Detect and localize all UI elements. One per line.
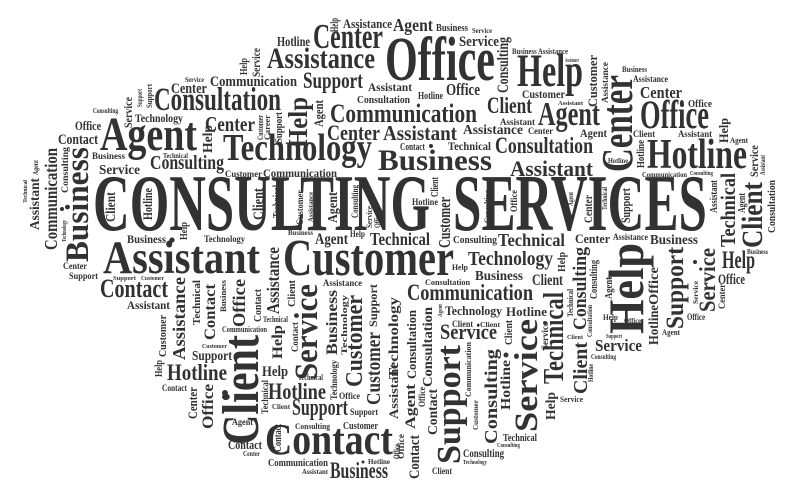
supporting words: Assistance — [323, 278, 362, 288]
supporting words: Consultation — [421, 307, 436, 387]
supporting words: Help — [603, 313, 618, 322]
supporting words: Service — [472, 27, 492, 35]
supporting words: Office — [392, 444, 402, 459]
supporting words: Technical — [298, 373, 324, 382]
supporting words: Service — [747, 144, 761, 177]
supporting words: Center — [243, 450, 260, 458]
supporting words: Customer — [202, 344, 227, 350]
supporting words: Assistant — [28, 178, 43, 230]
supporting words: Assistance — [307, 192, 315, 222]
supporting words: Agent — [403, 384, 419, 429]
supporting words: Technical — [272, 185, 283, 218]
supporting words: Support — [145, 84, 154, 108]
supporting words: Consultation — [154, 82, 281, 118]
supporting words: Office — [688, 98, 712, 110]
supporting words: Assistant — [558, 101, 583, 107]
supporting words: Technical — [539, 292, 570, 384]
supporting words: Service — [540, 322, 550, 350]
supporting words: Customer — [435, 197, 454, 248]
word: Technology: Technology — [223, 127, 372, 169]
word: Help (vertical): Help — [598, 243, 654, 334]
supporting words: Consulting — [481, 349, 501, 444]
supporting words: Business — [324, 290, 341, 355]
supporting words: Hotline — [636, 140, 647, 168]
supporting words: Business — [475, 269, 524, 284]
supporting words: Technology — [340, 295, 349, 355]
supporting words: Assistance — [600, 62, 610, 103]
supporting words: Assistance — [169, 277, 189, 360]
supporting words: Assistance — [263, 247, 283, 314]
supporting words: Technology — [329, 360, 339, 400]
supporting words: Customer — [343, 421, 378, 432]
supporting words: Hotline — [167, 360, 227, 385]
supporting words: Support — [662, 246, 689, 329]
supporting words: Consultation — [586, 305, 594, 337]
supporting words: Consultation — [404, 309, 419, 379]
supporting words: Support — [606, 334, 622, 340]
supporting words: Technology — [62, 220, 68, 242]
supporting words: Office — [200, 384, 217, 429]
supporting words: Consulting — [570, 247, 591, 330]
supporting words: Help — [350, 229, 365, 239]
supporting words: Client — [430, 176, 441, 197]
supporting words: Business — [330, 458, 388, 483]
supporting words: Client — [736, 182, 769, 248]
supporting words: Communication — [407, 280, 533, 305]
supporting words: Consulting — [350, 185, 360, 218]
supporting words: Client — [272, 403, 291, 411]
supporting words: Hotline — [499, 360, 514, 410]
supporting words: Technology — [135, 111, 183, 125]
supporting words: Customer — [225, 169, 262, 179]
supporting words: Hotline — [506, 304, 547, 319]
supporting words: Consulting — [93, 107, 118, 115]
supporting words: Business — [92, 151, 125, 161]
supporting words: Customer — [256, 115, 265, 140]
supporting words: Center — [313, 17, 383, 56]
title: Consulting: CONSULTING — [93, 160, 430, 248]
supporting words: Assistant — [709, 179, 720, 213]
supporting words: Center — [185, 387, 200, 419]
supporting words: Career — [263, 115, 272, 140]
supporting words: Client — [452, 319, 473, 329]
word: Agent: Agent — [100, 108, 197, 161]
supporting words: Customer — [141, 276, 164, 282]
supporting words: Client — [567, 335, 583, 341]
supporting words: Technical — [191, 280, 203, 325]
supporting words: Assistant — [383, 121, 457, 145]
supporting words: Hotline — [587, 364, 595, 382]
supporting words: Consulting — [150, 152, 224, 174]
supporting words: Agent — [567, 191, 575, 206]
supporting words: Consulting — [589, 260, 600, 299]
supporting words: Client — [532, 272, 563, 289]
supporting words: Client — [633, 129, 655, 139]
supporting words: Support — [69, 271, 98, 281]
word: Client (vertical): Client — [213, 334, 270, 445]
supporting words: Help — [238, 58, 250, 75]
supporting words: Consulting — [690, 171, 713, 177]
supporting words: Business — [60, 147, 96, 262]
supporting words: Office — [687, 312, 705, 322]
supporting words: Assistance — [613, 232, 648, 242]
supporting words: Communication — [210, 74, 298, 90]
supporting words: Contact — [290, 322, 300, 352]
supporting words: Technical — [498, 230, 565, 250]
word: Assistant: Assistant — [103, 232, 260, 284]
supporting words: Assistant — [510, 156, 594, 181]
supporting words: Business — [288, 229, 313, 237]
supporting words: Help — [283, 97, 313, 148]
supporting words: Office — [647, 267, 662, 305]
supporting words: Hotline — [412, 197, 438, 207]
supporting words: Center — [327, 120, 380, 145]
supporting words: Office — [446, 80, 480, 99]
supporting words: Client — [487, 93, 532, 118]
supporting words: Agent — [232, 417, 253, 427]
supporting words: Client — [480, 321, 501, 329]
supporting words: Service — [249, 47, 263, 77]
supporting words: Technical — [503, 433, 537, 444]
supporting words: Assistant — [500, 117, 535, 127]
word: Contact: Contact — [265, 415, 393, 464]
supporting words: Communication — [330, 99, 477, 128]
supporting words: Office — [373, 212, 382, 228]
supporting words: Technical — [370, 229, 430, 249]
supporting words: Consulting — [60, 146, 70, 193]
supporting words: Customer — [342, 295, 368, 387]
supporting words: Technology — [468, 248, 553, 270]
supporting words: Service — [121, 96, 135, 128]
supporting words: Communication — [642, 171, 687, 179]
supporting words: Communication — [268, 458, 328, 469]
supporting words: Support — [618, 187, 633, 223]
supporting words: Assistant — [759, 155, 767, 175]
supporting words: Consulting — [453, 235, 497, 246]
supporting words: Support — [431, 344, 468, 464]
word: Customer: Customer — [283, 230, 454, 287]
supporting words: Help — [517, 45, 583, 97]
supporting words: Service — [289, 284, 325, 380]
supporting words: Office — [339, 391, 360, 401]
supporting words: Center — [640, 83, 682, 102]
supporting words: Support — [192, 349, 232, 364]
supporting words: Help — [154, 360, 165, 377]
supporting words: Client — [570, 342, 592, 394]
supporting words: Office — [509, 190, 519, 212]
supporting words: Technical — [23, 180, 29, 203]
supporting words: Technical — [448, 139, 492, 153]
supporting words: Technical — [566, 288, 575, 317]
supporting words: Contact — [273, 423, 284, 452]
supporting words: Technology — [387, 297, 402, 379]
supporting words: Agent — [311, 99, 326, 127]
supporting words: Consulting — [483, 190, 492, 223]
supporting words: Support — [350, 407, 378, 417]
supporting words: Business — [219, 280, 228, 312]
supporting words: Customer — [363, 332, 385, 405]
supporting words: Help — [201, 125, 216, 153]
supporting words: Communication — [41, 148, 61, 250]
supporting words: Client — [251, 188, 267, 220]
supporting words: Consulting — [295, 422, 330, 431]
supporting words: Assistant — [127, 298, 170, 312]
supporting words: Customer — [585, 55, 600, 107]
supporting words: Agent — [662, 328, 680, 337]
supporting words: Assistant — [678, 129, 712, 139]
supporting words: Agent — [730, 136, 748, 145]
supporting words: Communication — [464, 341, 473, 397]
supporting words: Support — [113, 276, 136, 282]
supporting words: Customer — [295, 190, 305, 225]
supporting words: Office — [718, 272, 745, 288]
supporting words: Center — [575, 231, 610, 246]
supporting words: Agent — [438, 304, 444, 317]
supporting words: Help — [178, 222, 190, 240]
supporting words: Contact — [100, 274, 168, 303]
supporting words: Technical — [260, 380, 270, 414]
supporting words: Service — [595, 336, 642, 355]
supporting words: Help — [452, 263, 469, 272]
supporting words: Assistant — [302, 468, 329, 476]
supporting words: Support — [136, 89, 144, 107]
supporting words: Technical — [163, 152, 188, 160]
supporting words: Agent — [538, 96, 600, 133]
supporting words: Consulting — [463, 446, 504, 460]
supporting words: Service — [185, 76, 204, 84]
supporting words: Office — [624, 317, 641, 325]
supporting words: Assistant — [386, 363, 401, 419]
supporting words: Center — [528, 126, 553, 136]
supporting words: Communication — [222, 325, 267, 334]
supporting words: Agent — [737, 192, 748, 213]
supporting words: Customer — [522, 87, 566, 101]
supporting words: Hotline — [277, 35, 310, 50]
supporting words: Center — [581, 194, 595, 223]
supporting words: Help — [270, 325, 286, 359]
supporting words: Hotline — [647, 305, 662, 345]
supporting words: Technology — [445, 303, 502, 318]
supporting words: Technical — [601, 187, 609, 210]
supporting words: Business — [127, 232, 166, 246]
supporting words: Assistance — [267, 42, 375, 75]
supporting words: Service — [692, 281, 700, 304]
supporting words: Service — [509, 319, 545, 432]
supporting words: Client — [104, 192, 119, 222]
supporting words: Center — [171, 81, 207, 97]
supporting words: Agent — [603, 277, 615, 299]
supporting words: Client — [286, 280, 298, 307]
supporting words: Business — [378, 144, 492, 177]
supporting words: Hotline — [418, 91, 443, 102]
supporting words: Help — [716, 118, 731, 143]
supporting words: Agent — [393, 15, 433, 35]
supporting words: Consultation — [766, 180, 778, 233]
supporting words: Service — [459, 34, 499, 50]
supporting words: Agent — [326, 192, 341, 223]
supporting words: Contact — [426, 389, 441, 435]
supporting words: Support — [366, 284, 380, 327]
supporting words: Hotline — [268, 379, 326, 404]
supporting words: Help — [557, 252, 568, 272]
supporting words: Contact — [400, 142, 425, 153]
supporting words: Customer — [157, 315, 169, 357]
supporting words: Agent — [580, 126, 607, 140]
supporting words: Service — [440, 319, 497, 344]
supporting words: Consultation — [357, 94, 410, 106]
supporting words: Support — [273, 112, 285, 143]
supporting words: Contact — [407, 435, 423, 479]
supporting words: Contact — [58, 132, 98, 148]
supporting words: Consulting — [495, 37, 512, 93]
supporting words: Assistance — [565, 58, 579, 64]
supporting words: Hotline — [608, 157, 628, 165]
supporting words: Center — [63, 261, 87, 271]
supporting words: Contact — [253, 288, 264, 322]
supporting words: Hotline — [140, 188, 155, 220]
supporting words: Business — [650, 233, 699, 248]
supporting words: Center — [205, 112, 255, 136]
supporting words: Business — [436, 23, 468, 34]
supporting words: Business — [622, 65, 647, 74]
word: Office: Office — [385, 26, 495, 94]
supporting words: Help — [262, 364, 288, 380]
supporting words: Office — [640, 92, 709, 137]
supporting words: Technical — [716, 173, 740, 247]
supporting words: Consultation — [425, 278, 471, 287]
supporting words: Help — [544, 392, 559, 420]
supporting words: Client — [432, 466, 452, 476]
supporting words: Consulting — [497, 443, 520, 449]
supporting words: Center — [593, 75, 642, 172]
supporting words: Contact — [162, 383, 187, 393]
supporting words: Office — [417, 387, 427, 407]
supporting words: Office — [229, 279, 249, 327]
supporting words: Client — [504, 319, 515, 345]
supporting words: Service — [695, 248, 720, 312]
supporting words: Office — [75, 118, 101, 133]
supporting words: Service — [560, 395, 583, 404]
supporting words: Communication — [263, 166, 337, 180]
supporting words: Customer — [472, 400, 480, 430]
supporting words: Center — [717, 284, 727, 309]
supporting words: Business — [747, 248, 768, 256]
supporting words: Service — [99, 163, 140, 178]
supporting words: Consulting — [591, 353, 616, 361]
supporting words: Technology — [463, 460, 487, 466]
supporting words: Technical — [263, 315, 289, 324]
supporting words: Support — [303, 68, 363, 93]
supporting words: Support — [292, 395, 348, 421]
supporting words: Assistance — [343, 16, 392, 31]
word: Hotline: Hotline — [647, 132, 747, 178]
supporting words: Technology — [204, 234, 245, 244]
supporting words: Assistance — [633, 74, 668, 84]
supporting words: Consultation — [495, 133, 593, 158]
supporting words: Service — [365, 206, 374, 228]
supporting words: Business Assistance — [512, 47, 568, 56]
supporting words: Contact — [228, 437, 263, 452]
dots — [60, 39, 697, 464]
supporting words: Contact — [202, 283, 219, 340]
supporting words: Office — [396, 434, 406, 459]
supporting words: Hotline — [368, 458, 390, 466]
supporting words: Agent — [32, 159, 40, 175]
supporting words: Help — [327, 18, 341, 32]
supporting words: Assistant — [368, 80, 412, 94]
supporting words: Assistance — [463, 123, 523, 138]
supporting words: Help — [722, 247, 755, 274]
supporting words: Agent — [315, 231, 349, 248]
